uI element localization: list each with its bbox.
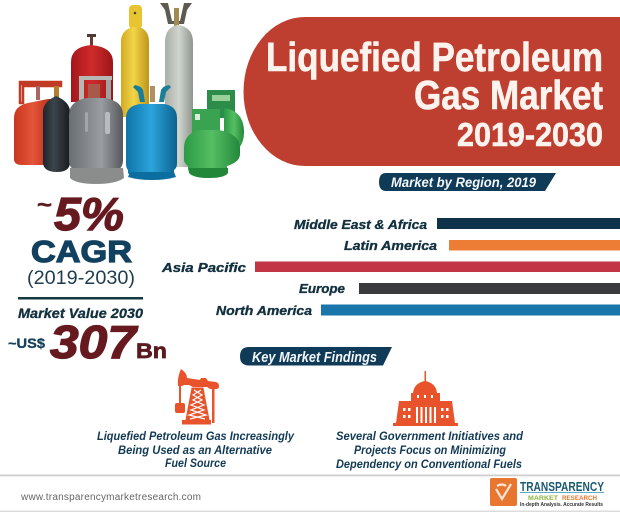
logo: Transparency Market Research: In-depth Analysis. Accurate Results	[520, 502, 603, 508]
stat: CAGR: 5%	[54, 188, 124, 240]
footer	[0, 474, 620, 512]
stat: market value 2030: Bn	[136, 340, 167, 363]
bar: Middle East & Africa	[294, 217, 620, 232]
icon: oil derrick	[175, 369, 219, 424]
cylinder: yellow	[121, 5, 149, 117]
cylinder: blue	[126, 85, 177, 180]
footer url: www.transparencymarketresearch.com	[20, 492, 201, 503]
heading: key market findings: Key Market Findings	[252, 350, 377, 366]
bar: Latin America	[344, 238, 620, 253]
cylinder: dark charcoal	[43, 96, 70, 172]
stat: CAGR: CAGR	[31, 234, 132, 269]
bar: North America: North America	[216, 303, 312, 318]
text: finding two: Dependency on Conventional Fuels	[336, 459, 522, 471]
bar: North America	[216, 303, 620, 318]
text: finding one: Fuel Source	[165, 458, 227, 470]
stat: CAGR	[27, 188, 135, 289]
title panel	[244, 17, 620, 166]
bar: Asia Pacific: Asia Pacific	[161, 260, 247, 275]
stat: market value 2030	[8, 297, 167, 368]
logo: Transparency Market Research: MARKET	[528, 495, 558, 502]
bar: Latin America: Latin America	[344, 238, 437, 253]
logo: Transparency Market Research	[490, 478, 604, 508]
stat: CAGR: (2019-2030)	[27, 268, 135, 289]
icon: government building	[393, 371, 458, 426]
cylinder: dark red	[71, 34, 113, 102]
text: finding one: Liquefied Petroleum Gas Increasingly	[97, 431, 295, 443]
stat: market value 2030: 307	[50, 316, 139, 368]
stat: market value 2030: ~US$	[8, 335, 45, 351]
text: finding two	[336, 431, 524, 471]
logo: Transparency Market Research: RESEARCH	[562, 495, 597, 502]
text: finding one	[97, 431, 295, 470]
stat: market value 2030: Market Value 2030	[18, 306, 144, 321]
cylinder: orange-red	[14, 82, 61, 165]
bar: Middle East & Africa: Middle East & Africa	[294, 217, 427, 232]
illustration: gas cylinders	[14, 3, 244, 184]
bar chart: market by region	[161, 217, 620, 318]
text: finding one: Being Used as an Alternative	[118, 445, 273, 457]
text: finding two: Several Government Initiatives and	[336, 431, 524, 443]
stat: CAGR: ~	[37, 192, 52, 217]
heading: market by region: Market by Region, 2019	[391, 175, 536, 190]
cylinder: grey	[69, 76, 124, 184]
title: 2019-2030	[457, 116, 603, 153]
cylinder: silver	[160, 3, 193, 167]
bar: Europe: Europe	[299, 281, 345, 296]
bar: Europe	[299, 281, 620, 296]
text: finding two: Projects Focus on Minimizing	[354, 445, 506, 457]
cylinder: green	[184, 90, 244, 178]
title	[266, 34, 603, 153]
bar: Asia Pacific	[161, 260, 620, 275]
